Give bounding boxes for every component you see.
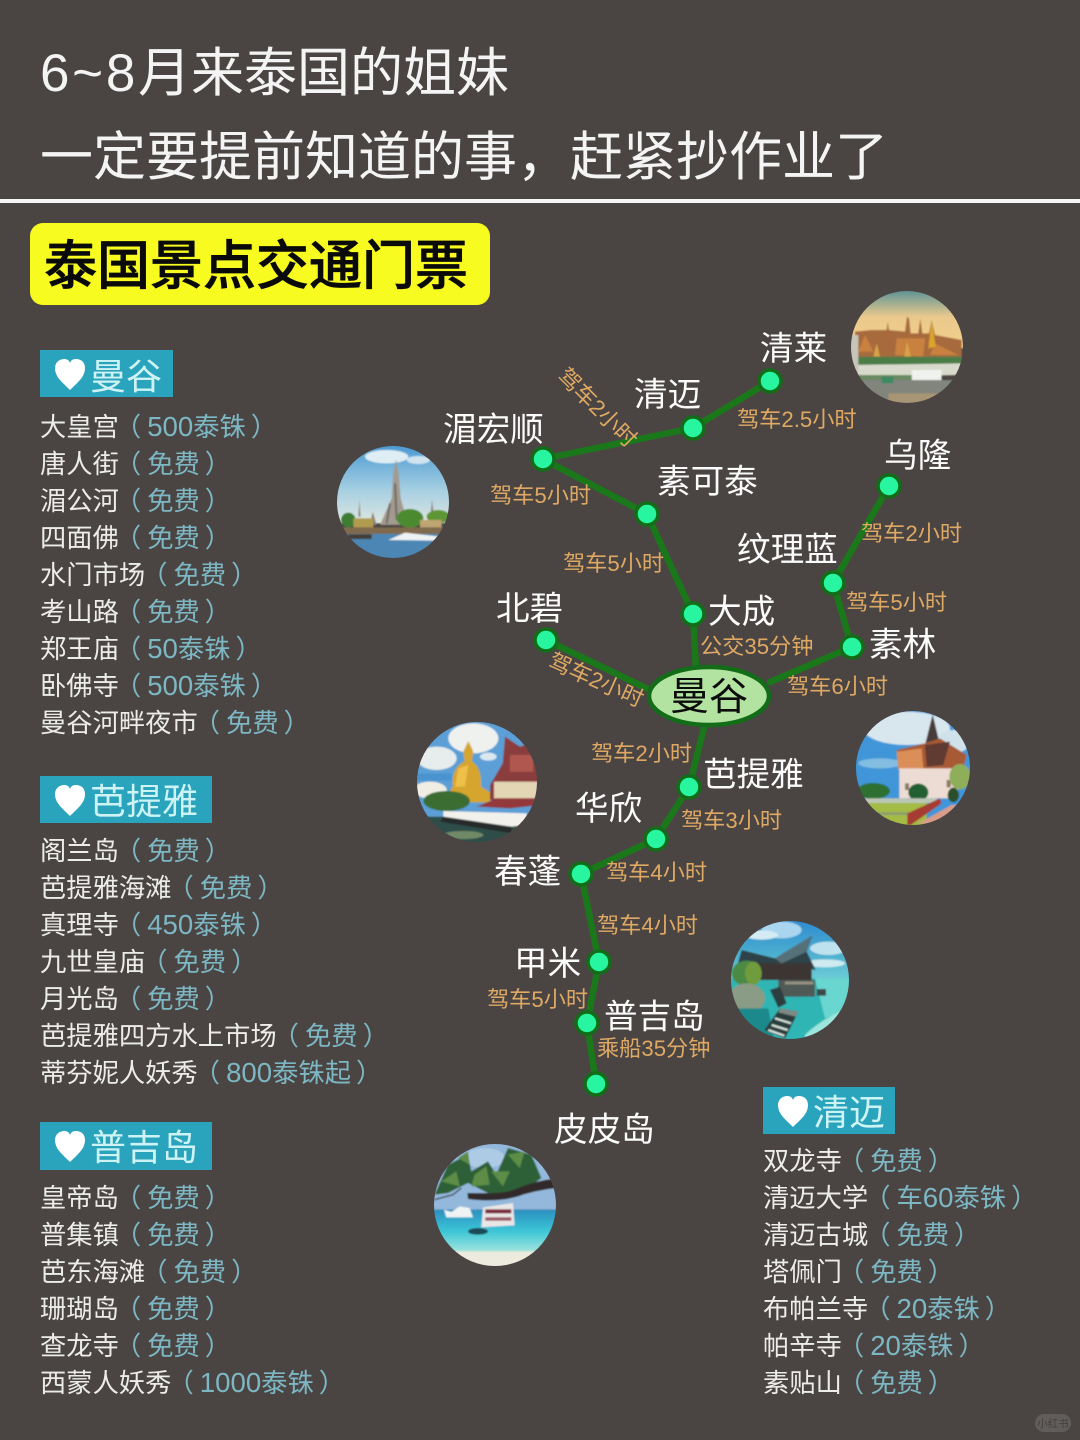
heading: 芭提雅 (40, 776, 212, 823)
heading: yellow banner (30, 223, 490, 305)
travel durations: 驾车5小时 (487, 987, 588, 1012)
panel: 曼谷 list: 曼谷河畔夜市（免费） (40, 708, 310, 738)
hub: 曼谷: 曼谷 (670, 676, 748, 719)
station dots (532, 370, 900, 1095)
panel: 普吉岛 list: 皇帝岛（免费） (40, 1183, 231, 1213)
city names: 素林 (869, 626, 936, 664)
panel: 清迈 list: 清迈大学（车60泰铢） (763, 1182, 1037, 1213)
panel: 曼谷 list: 大皇宫（500泰铢） (40, 411, 277, 442)
travel durations: 驾车2小时 (861, 521, 962, 546)
panel: 清迈 list: 素贴山（免费） (763, 1368, 954, 1398)
city names: 华欣 (575, 790, 642, 828)
travel durations: 公交35分钟 (700, 634, 813, 659)
heading: 清迈 (763, 1087, 895, 1134)
heading: 普吉岛 (40, 1122, 212, 1170)
panel: 清迈 list: 塔佩门（免费） (763, 1257, 954, 1287)
photo: beach (434, 1144, 556, 1266)
panel: 普吉岛 list: 珊瑚岛（免费） (40, 1294, 231, 1324)
heading: yellow banner: 泰国景点交通门票 (44, 237, 468, 296)
city names: 大成 (708, 593, 775, 631)
panel: 芭提雅 list: 芭提雅四方水上市场（免费） (40, 1021, 389, 1051)
panel: 清迈 list: 双龙寺（免费） (763, 1146, 954, 1176)
panel: 芭提雅 list: 月光岛（免费） (40, 984, 231, 1014)
city names: 甲米 (514, 945, 581, 983)
hub: 曼谷 (649, 667, 769, 725)
watermark: 小红书 (1037, 1417, 1069, 1430)
travel durations: 驾车2小时 (591, 741, 692, 766)
heading: 曼谷 (40, 350, 173, 397)
travel durations: 乘船35分钟 (597, 1036, 710, 1061)
panel: 曼谷 list: 考山路（免费） (40, 597, 231, 627)
panel: 普吉岛 list (40, 1122, 345, 1398)
heading: 清迈: 清迈 (813, 1092, 885, 1133)
route lines (543, 381, 889, 1084)
title: 一定要提前知道的事，赶紧抄作业了 (40, 128, 888, 187)
photo: Wat Arun (337, 446, 449, 558)
travel durations: 驾车6小时 (787, 674, 888, 699)
city names: 北碧 (496, 590, 563, 628)
panel: 曼谷 list: 四面佛（免费） (40, 523, 231, 553)
photo: Grand Palace (851, 291, 963, 403)
travel durations: 驾车2小时 (545, 648, 647, 712)
panel: 曼谷 list: 水门市场（免费） (40, 560, 257, 590)
travel durations (487, 363, 962, 1061)
panel: 清迈 list (763, 1087, 1037, 1398)
title (40, 44, 888, 187)
panel: 芭提雅 list: 蒂芬妮人妖秀（800泰铢起） (40, 1057, 382, 1088)
travel durations: 驾车4小时 (597, 913, 698, 938)
city names: 清迈 (634, 377, 701, 414)
city names: 皮皮岛 (554, 1111, 655, 1149)
city names: 春蓬 (494, 853, 561, 891)
city names: 湄宏顺 (443, 411, 544, 449)
heading: 普吉岛: 普吉岛 (90, 1127, 198, 1168)
panel: 芭提雅 list: 真理寺（450泰铢） (40, 909, 277, 940)
panel: 芭提雅 list: 芭提雅海滩（免费） (40, 873, 284, 903)
panel: 曼谷 list: 卧佛寺（500泰铢） (40, 670, 277, 701)
city names: 普吉岛 (604, 998, 705, 1036)
panel: 普吉岛 list: 西蒙人妖秀（1000泰铢） (40, 1367, 345, 1398)
heading: 芭提雅: 芭提雅 (90, 781, 198, 822)
photo: sea hut (731, 921, 849, 1039)
photo: golden Buddha (417, 722, 537, 842)
photo: temple and garden (856, 711, 970, 825)
city names: 芭提雅 (703, 756, 804, 794)
travel durations: 驾车2.5小时 (737, 407, 857, 432)
panel: 普吉岛 list: 芭东海滩（免费） (40, 1257, 257, 1287)
panel: 清迈 list: 布帕兰寺（20泰铢） (763, 1293, 1011, 1324)
heading: 曼谷: 曼谷 (90, 356, 162, 397)
city names: 清莱 (760, 330, 827, 368)
city names: 纹理蓝 (737, 531, 838, 569)
panel: 曼谷 list: 湄公河（免费） (40, 486, 231, 516)
travel durations: 驾车5小时 (490, 483, 591, 508)
travel durations: 驾车5小时 (563, 551, 664, 576)
travel durations: 驾车3小时 (681, 808, 782, 833)
panel: 曼谷 list: 唐人街（免费） (40, 449, 231, 479)
city names (443, 330, 951, 1149)
panel: 芭提雅 list: 阁兰岛（免费） (40, 836, 231, 866)
panel: 清迈 list: 清迈古城（免费） (763, 1220, 980, 1250)
panel: 芭提雅 list: 九世皇庙（免费） (40, 947, 257, 977)
travel durations: 驾车5小时 (846, 590, 947, 615)
panel: 普吉岛 list: 普集镇（免费） (40, 1220, 231, 1250)
watermark (1035, 1414, 1071, 1432)
panel: 曼谷 list: 郑王庙（50泰铢） (40, 633, 262, 664)
panel: 曼谷 list (40, 350, 310, 738)
title: 6~8月来泰国的姐妹 (40, 44, 509, 103)
city names: 素可泰 (657, 463, 758, 501)
travel durations: 驾车2小时 (553, 363, 642, 452)
panel: 芭提雅 list (40, 776, 389, 1088)
route map (443, 330, 962, 1149)
city names: 乌隆 (884, 437, 951, 475)
panel: 清迈 list: 帕辛寺（20泰铢） (763, 1330, 985, 1361)
panel: 普吉岛 list: 查龙寺（免费） (40, 1331, 231, 1361)
travel durations: 驾车4小时 (606, 860, 707, 885)
